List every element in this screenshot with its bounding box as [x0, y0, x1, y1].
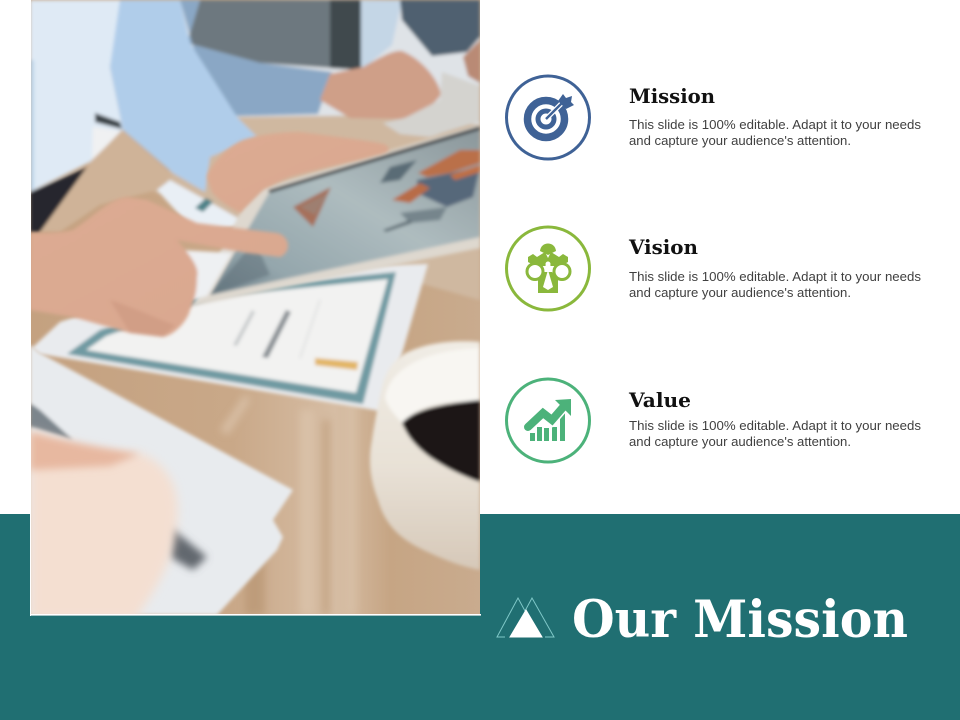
foreground papers and blurred hand — [30, 345, 293, 615]
heading: Value: Value — [628, 388, 691, 412]
text: Vision description: This slide is 100% editable. Adapt it to your needs — [629, 269, 921, 284]
heading: Mission: Mission — [629, 84, 715, 108]
title: Our Mission — [572, 590, 908, 650]
tablet — [193, 124, 480, 306]
paper with teal border — [32, 264, 428, 412]
row: Mission — [506, 76, 921, 159]
pointing and holding hands — [30, 132, 389, 337]
text: Mission description — [629, 117, 921, 148]
background figures — [30, 0, 480, 300]
text: Mission description: This slide is 100% editable. Adapt it to your needs — [629, 117, 921, 132]
icon: target with arrow — [506, 76, 590, 159]
heading: Vision: Vision — [628, 235, 698, 259]
icon: binoculars — [506, 227, 590, 310]
wood streaks — [220, 395, 357, 615]
text: Vision description: and capture your audience's attention. — [629, 285, 851, 300]
row: Vision — [506, 227, 921, 310]
coffee cup — [370, 341, 480, 570]
row: Value — [506, 379, 921, 462]
icon: rising chart arrow — [506, 379, 590, 462]
text: Value description: and capture your audience's attention. — [629, 434, 851, 449]
teal footer band — [0, 514, 960, 720]
text: Mission description: and capture your audience's attention. — [629, 133, 851, 148]
text: Value description: This slide is 100% editable. Adapt it to your needs — [629, 418, 921, 433]
text: Vision description — [629, 269, 921, 300]
text: Value description — [629, 418, 921, 449]
icon: mountain logo — [497, 598, 554, 637]
photo: hands with tablet, papers and coffee on a desk — [30, 0, 481, 620]
